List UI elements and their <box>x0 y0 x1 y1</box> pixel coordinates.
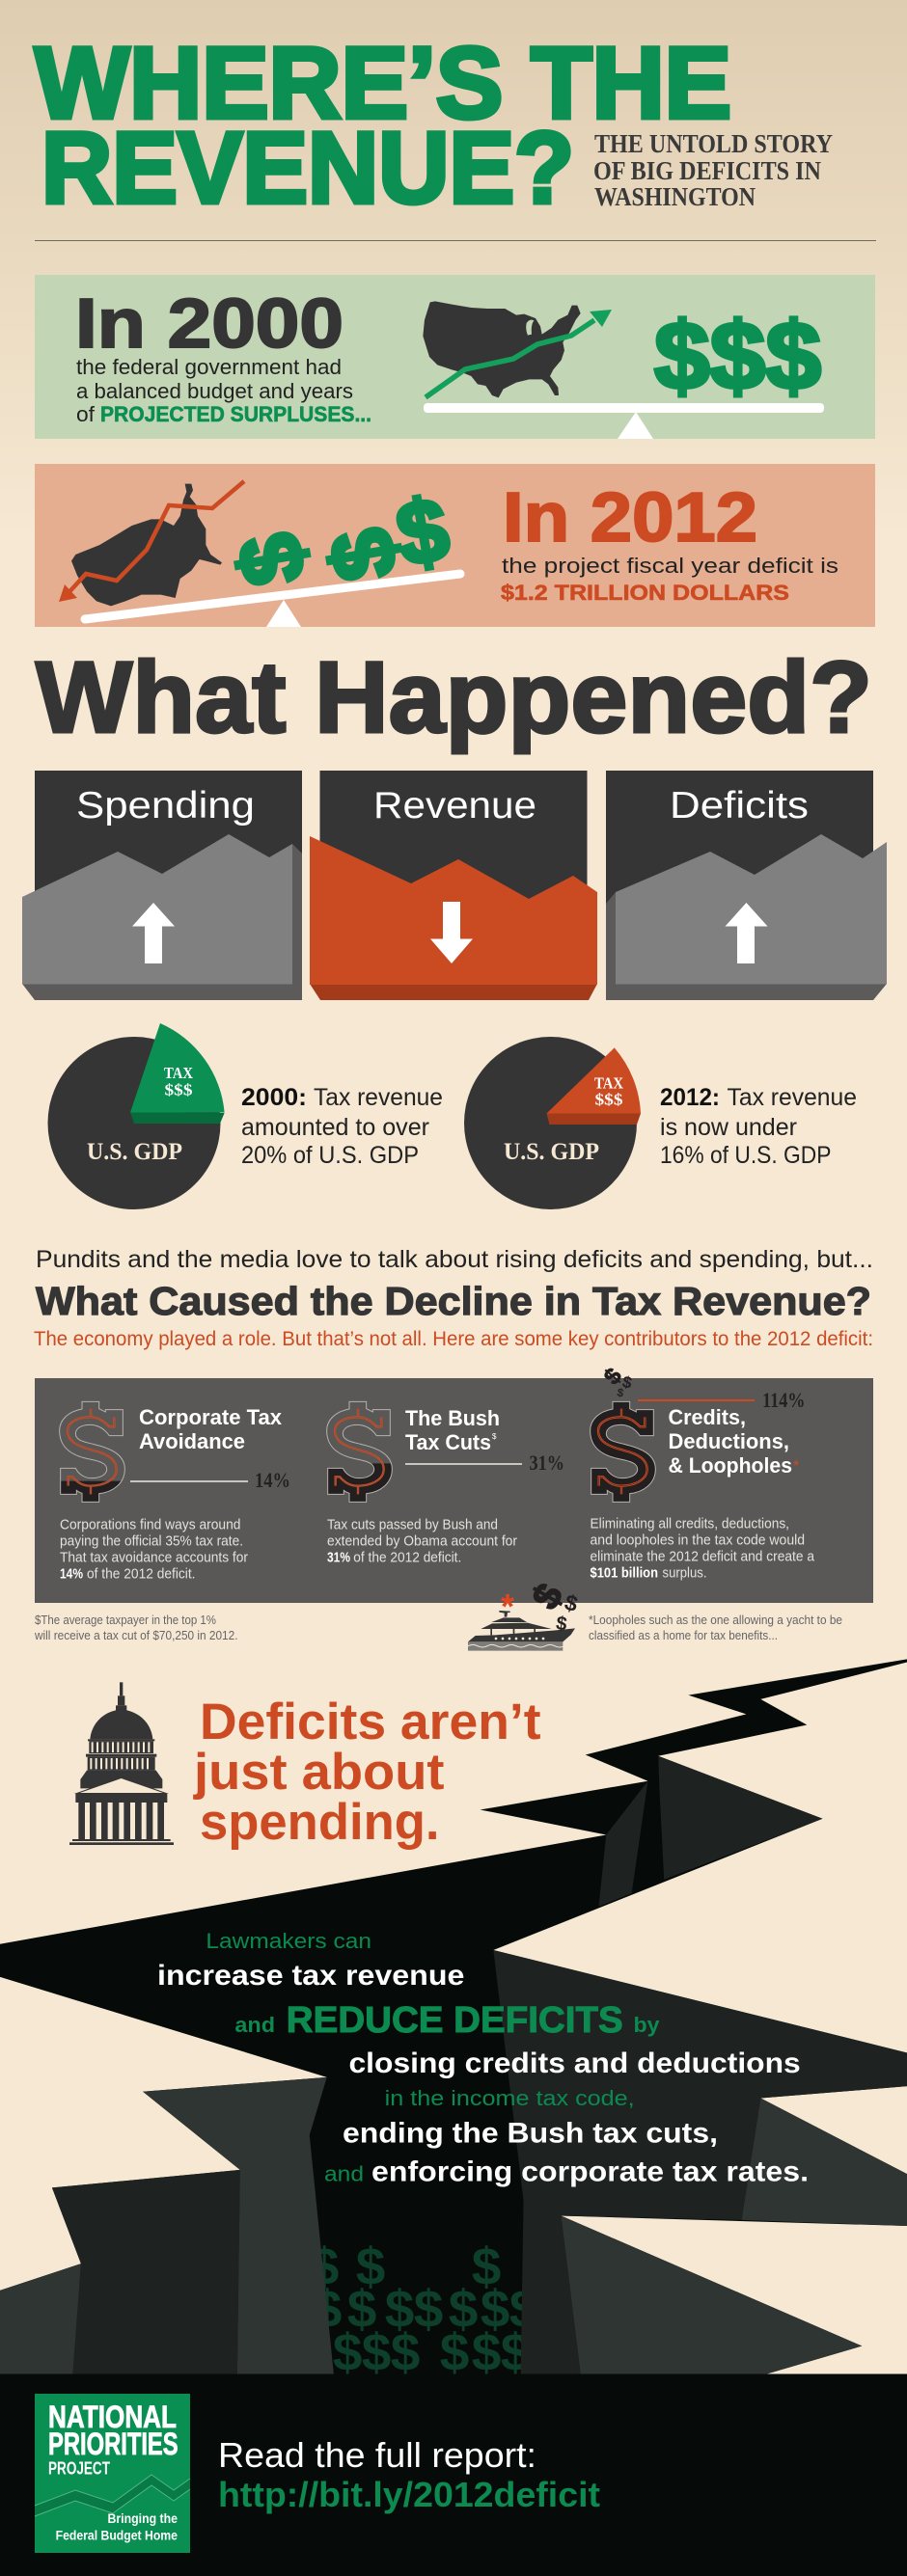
money in the crack: $ <box>472 2322 501 2382</box>
callout: 14%: 14% <box>255 1468 290 1492</box>
heading: corporate tax avoidance <box>139 1405 283 1453</box>
subtitle: OF BIG DEFICITS IN <box>593 156 821 185</box>
panel: in 2000 <box>35 275 875 439</box>
heading: corporate tax avoidance: Avoidance <box>139 1429 245 1453</box>
subtitle <box>593 129 833 211</box>
icon: tilted balance <box>85 574 460 627</box>
heading: credits deductions loopholes: Deductions, <box>668 1429 789 1453</box>
text: lawmakers message: enforcing corporate tax rates. <box>371 2156 809 2188</box>
icon: tilted dollars: $ <box>390 479 455 585</box>
dollars: $ <box>524 1577 571 1616</box>
dollars <box>524 1577 581 1636</box>
footnote: top 1%: $The average taxpayer in the top 1% <box>35 1613 216 1627</box>
icon: tilted dollars <box>219 479 455 592</box>
text: 2012 revenue: Tax revenue <box>728 1084 857 1111</box>
text: lawmakers message: in the income tax code, <box>385 2086 635 2110</box>
panel: footer <box>0 2374 907 2576</box>
heading: corporate tax avoidance: Corporate Tax <box>139 1405 283 1429</box>
text: bush body: extended by Obama account for <box>327 1534 517 1550</box>
heading: credits deductions loopholes <box>668 1405 799 1478</box>
heading: in 2000: In 2000 <box>75 285 344 363</box>
logo: national priorities project <box>35 2394 190 2553</box>
heading: deficits aren't just about spending: just about <box>193 1744 444 1801</box>
heading: deficits aren't just about spending: spending. <box>200 1794 440 1851</box>
label: tax <box>164 1064 194 1099</box>
money in the crack: $ <box>449 2279 478 2339</box>
icon: dollar 14% <box>60 1401 124 1502</box>
money in the crack: $ <box>472 2237 501 2296</box>
money in the crack: $ <box>362 2322 391 2382</box>
label: tax: $$$ <box>594 1090 623 1109</box>
title: REVENUE? <box>41 112 574 225</box>
logo: national priorities project: PROJECT <box>48 2459 110 2479</box>
text: 2000 revenue: 20% of U.S. GDP <box>241 1142 419 1169</box>
footnote: loopholes <box>589 1613 842 1642</box>
text: credits body: $101 billion <box>591 1566 658 1582</box>
footnote: loopholes: classified as a home for tax benefits... <box>589 1629 778 1642</box>
text: balanced budget <box>76 355 371 426</box>
text: bush body: Tax cuts passed by Bush and <box>327 1518 498 1533</box>
heading: credits deductions loopholes: Credits, <box>668 1405 746 1429</box>
label: tax: TAX <box>594 1074 624 1092</box>
icon: US map <box>423 301 581 397</box>
text: 2012 revenue <box>660 1084 857 1169</box>
text: lawmakers message: and <box>234 2013 275 2037</box>
asterisk: * <box>501 1586 514 1626</box>
footnote: top 1% <box>34 1613 238 1642</box>
text: lawmakers message: by <box>633 2013 660 2037</box>
water <box>468 1641 563 1651</box>
icon: $$$: $$$ <box>654 302 821 409</box>
text: corporate body: of the 2012 deficit. <box>87 1567 195 1583</box>
dollars: $ <box>563 1589 581 1616</box>
money in the crack: $ <box>356 2237 385 2296</box>
text: deficit <box>501 554 838 605</box>
text: lawmakers message <box>157 1929 809 2188</box>
panel: contributors <box>35 1378 873 1603</box>
footnote: loopholes: *Loopholes such as the one allowing a yacht to be <box>589 1613 842 1627</box>
heading: bush tax cuts: The Bush <box>405 1406 500 1430</box>
crack faces <box>0 1756 907 2380</box>
heading: what caused the decline: What Caused the Decline in Tax Revenue? <box>36 1279 871 1323</box>
icon: yacht with dollars <box>468 1577 581 1651</box>
label: gdp: U.S. GDP <box>504 1139 599 1165</box>
money in the crack: $ <box>440 2322 469 2382</box>
icon: balance <box>424 403 824 439</box>
label: revenue: Revenue <box>373 785 536 827</box>
text: corporate body: 14% <box>60 1567 83 1583</box>
logo: national priorities project: NATIONAL <box>48 2400 177 2434</box>
icon: dollar 31% <box>327 1401 392 1502</box>
text: 2000 revenue <box>241 1084 443 1169</box>
callout: 114%: 114% <box>762 1388 805 1412</box>
heading: credits deductions loopholes: * <box>793 1458 799 1475</box>
icon: rising dollars: $ <box>620 1372 634 1393</box>
heading: credits deductions loopholes: & Loopholes <box>668 1453 792 1478</box>
label: gdp: U.S. GDP <box>87 1139 182 1165</box>
text: corporate body: That tax avoidance accounts for <box>60 1551 248 1566</box>
logo: national priorities project: PRIORITIES <box>48 2427 179 2461</box>
heading: in 2012: In 2012 <box>503 479 757 556</box>
footnote: top 1%: will receive a tax cut of $70,250 in 2012. <box>34 1629 238 1642</box>
panel: deficits <box>606 771 887 1000</box>
text: balanced budget: of <box>76 402 96 426</box>
text: deficit: $1.2 TRILLION DOLLARS <box>501 581 789 605</box>
label: deficits: Deficits <box>670 785 809 827</box>
icon: rising dollars: $ <box>616 1385 625 1400</box>
text: lawmakers message: closing credits and deductions <box>349 2047 801 2079</box>
panel: revenue <box>310 771 597 1000</box>
heading: bush tax cuts: $ <box>492 1432 497 1441</box>
label: tax: TAX <box>164 1064 194 1082</box>
icon: tilted dollars: $ <box>219 527 325 592</box>
text: balanced budget: PROJECTED SURPLUSES... <box>100 402 371 426</box>
text: balanced budget: the federal government had <box>76 355 342 379</box>
heading: deficits aren't just about spending: Deficits aren’t <box>200 1694 540 1750</box>
money in the crack: $ <box>481 2279 509 2339</box>
money in the crack: $ <box>509 2279 538 2339</box>
logo: national priorities project: Federal Budget Home <box>56 2528 178 2543</box>
text: lawmakers message: Lawmakers can <box>206 1929 371 1953</box>
text: credits body: and loopholes in the tax code would <box>591 1533 805 1549</box>
arrow: falling line <box>59 481 244 602</box>
text: credits body: surplus. <box>662 1566 706 1582</box>
callout: 31%: 31% <box>529 1451 564 1475</box>
arrow: up <box>726 903 768 963</box>
heading: deficits aren't just about spending <box>193 1694 540 1851</box>
text: corporate body <box>60 1518 248 1583</box>
money in the crack: $ <box>310 2237 339 2296</box>
text: read the full report: Read the full report: <box>218 2435 536 2475</box>
money in the crack <box>320 2245 522 2374</box>
text: bush body <box>327 1518 517 1566</box>
link: report url: http://bit.ly/2012deficit <box>218 2475 600 2514</box>
text: balanced budget: a balanced budget and years <box>76 379 353 403</box>
icon: capitol <box>69 1682 174 1845</box>
money in the crack: $ <box>501 2322 530 2382</box>
dollars: $ <box>555 1613 568 1636</box>
panel: spending <box>22 771 302 1000</box>
text: 2000 revenue: Tax revenue <box>314 1084 443 1111</box>
icon: tilted US map <box>71 484 222 606</box>
icon: dollar 114% <box>591 1401 655 1502</box>
text: 2012 revenue: is now under <box>660 1114 797 1141</box>
arrow: rising line <box>426 310 612 397</box>
text: key contributors: The economy played a role. But that’s not all. Here are some key contributors to the 2012 deficit: <box>34 1328 873 1350</box>
text: 2012 revenue: 2012: <box>660 1084 720 1111</box>
text: 2000 revenue: 2000: <box>241 1084 307 1111</box>
illustration: crack <box>0 1659 907 2382</box>
label: tax: $$$ <box>164 1080 193 1099</box>
money in the crack: $ <box>347 2279 376 2339</box>
text: lawmakers message: and <box>324 2162 364 2186</box>
panel: in 2012 <box>35 464 875 627</box>
heading: what happened: What Happened? <box>36 641 872 754</box>
text: lawmakers message: increase tax revenue <box>157 1960 464 1992</box>
money in the crack: $ <box>313 2279 342 2339</box>
arrow: up <box>132 903 175 963</box>
money in the crack: $ <box>391 2322 420 2382</box>
arrow: down <box>430 902 473 963</box>
text: pundits: Pundits and the media love to talk about rising deficits and spending, but... <box>36 1246 873 1273</box>
label: spending: Spending <box>76 785 255 827</box>
chart: 2012 pie <box>464 1037 641 1209</box>
money in the crack: $ <box>414 2279 443 2339</box>
logo: national priorities project: Bringing the <box>108 2510 178 2526</box>
subtitle: THE UNTOLD STORY <box>594 129 833 158</box>
heading: bush tax cuts <box>405 1406 500 1454</box>
text: corporate body: paying the official 35% tax rate. <box>60 1534 243 1550</box>
text: bush body: 31% <box>327 1551 350 1566</box>
text: credits body: Eliminating all credits, deductions, <box>591 1517 789 1532</box>
hull <box>468 1611 575 1641</box>
title <box>35 27 731 225</box>
portholes <box>495 1638 544 1640</box>
text: corporate body: Corporations find ways around <box>60 1518 241 1533</box>
text: credits body <box>591 1517 815 1582</box>
text: lawmakers message: ending the Bush tax cuts, <box>343 2117 718 2149</box>
text: credits body: eliminate the 2012 deficit and create a <box>591 1550 815 1565</box>
heading: bush tax cuts: Tax Cuts <box>405 1430 491 1454</box>
subtitle: WASHINGTON <box>594 182 756 211</box>
icon: rising dollars <box>599 1363 634 1400</box>
text: 2000 revenue: amounted to over <box>241 1114 429 1141</box>
text: 2012 revenue: 16% of U.S. GDP <box>660 1142 832 1169</box>
money in the crack: $ <box>333 2322 362 2382</box>
icon: rising dollars: $ <box>599 1363 627 1390</box>
chart: 2000 pie <box>48 1023 225 1209</box>
icon: tilted dollars: $ <box>311 522 417 587</box>
text: deficit: the project fiscal year deficit is <box>502 554 838 578</box>
label: tax <box>594 1074 624 1109</box>
title: WHERE’S THE <box>35 27 731 140</box>
money in the crack: $ <box>385 2279 414 2339</box>
text: lawmakers message: REDUCE DEFICITS <box>287 2000 623 2041</box>
text: bush body: of the 2012 deficit. <box>353 1551 461 1566</box>
